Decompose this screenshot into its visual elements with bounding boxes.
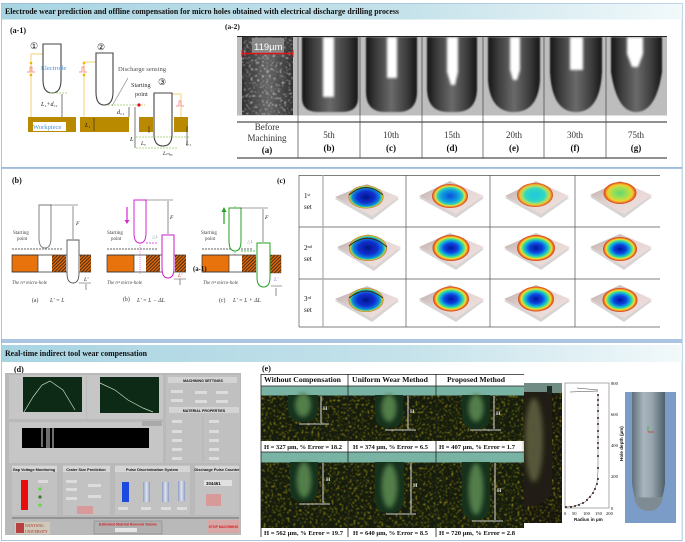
- micrograph: 15th: [427, 37, 477, 112]
- column labels: Before: [255, 122, 279, 132]
- micrograph: proposed 720: [462, 462, 503, 521]
- label: a-2: (a-2): [225, 22, 240, 31]
- micrograph: before machining: 119µm: [254, 42, 283, 53]
- plot: row 3 col 1: [335, 286, 399, 322]
- panel: compensation schematic and surface plots (b, c): [1, 168, 682, 340]
- discharge pulse counter: [194, 465, 240, 515]
- diagram: electrode discharge sensing: Workpiece: [33, 124, 61, 131]
- plot: row 3 col 3: [504, 285, 570, 322]
- strip chart: machining: [9, 421, 163, 463]
- label: d: (d): [14, 365, 24, 374]
- plot: row 2 col 3: [504, 233, 570, 270]
- micrograph: uniform wear 640: H: [413, 483, 418, 489]
- electrode micrographs table: [237, 36, 667, 158]
- micrograph: 30th: [550, 37, 602, 112]
- captions: H = 374 µm, % Error = 6.5: [353, 445, 428, 451]
- plot: row 1 col 2: [419, 181, 484, 218]
- diagram: electrode discharge sensing: L₁: [185, 141, 191, 147]
- micrograph: 10th: [366, 37, 417, 112]
- pulse discrimination system: [115, 465, 190, 515]
- column labels: (a): [262, 145, 272, 155]
- gap voltage monitoring: [12, 465, 57, 515]
- row labels: set: [304, 306, 312, 314]
- chart: gap voltage: [9, 375, 86, 419]
- row labels: [304, 192, 313, 314]
- captions: H = 562 µm, % Error = 19.7: [264, 531, 343, 537]
- micrograph: uniform wear 374: H: [410, 409, 415, 415]
- schematic: L' = L + delta L: △L: [247, 239, 254, 244]
- chart: hole radius vs depth: [564, 381, 624, 522]
- captions: H = 327 µm, % Error = 18.2: [264, 445, 342, 451]
- column headings: Proposed Method: [447, 376, 505, 384]
- axis labels: Hole depth (µm): [619, 426, 624, 461]
- column labels: Machining: [248, 133, 287, 143]
- diagram: electrode discharge sensing: L₁: [84, 123, 90, 129]
- axis labels: 100: [583, 511, 591, 516]
- crater size prediction: [63, 465, 110, 515]
- schematic: L' = L: (a): [32, 297, 39, 304]
- schematic: L' = L + delta L: L' = L + ΔL: [232, 298, 261, 304]
- gap voltage monitoring: Gap Voltage Monitoring: [13, 468, 56, 472]
- diagram: electrode discharge sensing: d꜀₁: [117, 110, 124, 116]
- schematic: L' = L - delta L: point: [111, 237, 122, 242]
- stop machining button: STOP MACHINING: [209, 525, 239, 529]
- panel: offline compensation (a): [1, 3, 682, 168]
- diagram: electrode discharge sensing: Discharge sensing: [118, 66, 167, 73]
- schematic: L' = L: point: [17, 237, 28, 242]
- schematic: L' = L + delta L: F: [264, 215, 269, 221]
- schematic: L' = L: F: [75, 221, 80, 227]
- diagram: electrode discharge sensing: [27, 41, 191, 157]
- diagram: electrode discharge sensing: ①: [30, 41, 38, 51]
- column headings: Without Compensation: [264, 376, 341, 384]
- diagram: electrode discharge sensing: Starting: [131, 82, 151, 89]
- discharge pulse counter: Discharge Pulse Counter: [194, 468, 240, 472]
- captions: [264, 445, 515, 537]
- logo: Nanyang University: UNIVERSITY: [25, 530, 48, 534]
- plot: row 2 col 1: [337, 234, 401, 271]
- column headings: [264, 376, 505, 384]
- schematic: L' = L + delta L: The nᵗʰ micro-hole: [203, 280, 239, 286]
- axis labels: [564, 381, 624, 522]
- axis labels: 50: [572, 511, 577, 516]
- machining settings: MATERIAL PROPERTIES: [183, 409, 226, 413]
- label: a-1: (a-1): [10, 26, 26, 35]
- 3D electrode render: [625, 392, 676, 523]
- micrograph: hole cross-section: [524, 383, 562, 523]
- heading: real-time indirect tool wear compensation: Real-time indirect tool wear compensation: [5, 349, 148, 358]
- plot: row 1 col 4: [590, 181, 652, 218]
- micrograph: without compensation 562: [290, 462, 331, 504]
- discharge pulse counter: 304461: [206, 481, 221, 486]
- column labels: (b): [324, 143, 335, 153]
- schematic: L' = L: [12, 205, 91, 304]
- row labels: set: [304, 203, 312, 211]
- column labels: [248, 122, 644, 155]
- chart: crater size: [87, 375, 163, 419]
- micrograph: before machining: [242, 37, 293, 115]
- captions: H = 720 µm, % Error = 2.8: [439, 531, 515, 537]
- schematic: L' = L - delta L: △L: [152, 234, 159, 239]
- row labels: 3ʳᵈ: [304, 295, 312, 303]
- row labels: set: [304, 255, 312, 263]
- micrograph: uniform wear 640: [375, 462, 418, 514]
- micrograph: uniform wear 374: [375, 394, 416, 430]
- micrograph: 5th: [302, 37, 358, 112]
- header band: offline compensation: [2, 4, 682, 20]
- schematic: L' = L + delta L: Starting: [201, 231, 217, 236]
- schematic: L' = L - delta L: [107, 200, 186, 304]
- plot: row 3 col 2: [419, 285, 484, 322]
- micrograph: without compensation 327: [288, 393, 329, 424]
- column labels: 10th: [383, 130, 399, 140]
- axis labels: 400: [611, 443, 619, 448]
- axis labels: 0: [611, 506, 614, 511]
- diagram: electrode discharge sensing: Lₘₐₓ: [162, 151, 173, 157]
- pulse discrimination system: Pulse Discrimination System: [126, 468, 179, 472]
- schematic: L' = L - delta L: L' = L − ΔL: [136, 298, 165, 304]
- label: b: (b): [12, 176, 22, 185]
- row labels: 2ⁿᵈ: [304, 244, 313, 252]
- schematic: L' = L - delta L: (b): [123, 296, 130, 303]
- column labels: (c): [386, 143, 396, 153]
- schematic: L' = L - delta L: F: [169, 215, 174, 221]
- column labels: 20th: [506, 130, 522, 140]
- micrograph: proposed 407: [462, 394, 501, 430]
- diagram: electrode discharge sensing: L₁+d꜀₁: [40, 102, 58, 108]
- surface plot table: [299, 175, 660, 327]
- plot: row 2 col 4: [590, 234, 652, 270]
- column labels: (e): [509, 143, 519, 153]
- axis labels: Radius in µm: [574, 517, 603, 522]
- label: c: (c): [277, 176, 286, 185]
- plot: row 1 col 3: [505, 181, 569, 218]
- schematic: L' = L: L' = L: [49, 298, 64, 304]
- machining settings: [166, 375, 240, 463]
- schematic: L' = L - delta L: The nᵗʰ micro-hole: [107, 280, 143, 286]
- diagram: electrode discharge sensing: Electrode: [41, 65, 66, 72]
- software screenshot: [5, 373, 241, 535]
- schematic: L' = L + delta L: (c): [219, 297, 226, 304]
- column labels: 5th: [323, 130, 335, 140]
- logo: Nanyang University: NANYANG: [25, 524, 44, 528]
- axis labels: 150: [595, 511, 603, 516]
- machining settings: MACHINING SETTINGS: [183, 379, 223, 383]
- axis labels: 200: [606, 511, 614, 516]
- column headings: Uniform Wear Method: [352, 376, 428, 384]
- captions: H = 640 µm, % Error = 8.5: [353, 531, 428, 537]
- estimated material removal volume: Estimated Material Removal Volume: [99, 522, 157, 526]
- schematic: L' = L: L': [83, 277, 89, 283]
- micrograph: proposed 720: H: [497, 488, 502, 494]
- axis labels: 800: [611, 381, 619, 386]
- header band: real-time: [2, 345, 682, 362]
- label: e: (e): [262, 364, 271, 373]
- column labels: 15th: [444, 130, 460, 140]
- micrograph: 75th: [611, 37, 662, 112]
- schematic: L' = L - delta L: L': [177, 273, 183, 279]
- panel: real-time compensation (d, e): [1, 342, 682, 541]
- diagram: electrode discharge sensing: point: [135, 91, 148, 98]
- estimated material removal volume: [94, 521, 162, 534]
- diagram: electrode discharge sensing: Lₐ: [140, 141, 146, 147]
- micrograph: without compensation 327: H: [323, 406, 328, 412]
- micrograph: without compensation 562: H: [326, 477, 331, 483]
- row labels: 1ˢᵗ: [304, 192, 311, 200]
- data points: [565, 394, 599, 508]
- schematic: L' = L + delta L: (a-1): [193, 266, 207, 273]
- schematic: L' = L: The nᵗʰ micro-hole: [12, 280, 48, 286]
- diagram: electrode discharge sensing: ③: [158, 77, 166, 87]
- column labels: 30th: [567, 130, 583, 140]
- stop machining button: [208, 520, 239, 533]
- plot: row 2 col 2: [419, 233, 484, 270]
- diagram: electrode discharge sensing: ②: [97, 42, 105, 52]
- axis labels: 200: [611, 474, 619, 479]
- schematic: L' = L + delta L: point: [205, 237, 216, 242]
- crater size prediction: Crater Size Prediction: [66, 468, 106, 472]
- plot: row 3 col 4: [590, 285, 652, 322]
- heading: electrode wear prediction: Electrode wear prediction and offline compensation for micro holes obtained with electrical discharge drilling process: [5, 7, 400, 16]
- micrograph comparison table: [261, 374, 524, 537]
- column labels: (g): [631, 143, 641, 153]
- micrograph: 20th: [488, 37, 540, 112]
- column labels: (d): [446, 143, 458, 153]
- schematic: L' = L + delta L: [193, 206, 282, 304]
- schematic: L' = L - delta L: Starting: [107, 231, 123, 236]
- captions: H = 407 µm, % Error = 1.7: [439, 445, 515, 451]
- column labels: 75th: [628, 130, 644, 140]
- micrograph: proposed 407: H: [496, 411, 501, 417]
- diagram: electrode discharge sensing: L: [129, 136, 134, 143]
- schematic: L' = L: Starting: [13, 231, 29, 236]
- column labels: (f): [570, 143, 580, 153]
- axis labels: 600: [611, 412, 619, 417]
- plot: row 1 col 1: [335, 184, 399, 220]
- axis labels: 0: [564, 511, 567, 516]
- logo: Nanyang University: [15, 522, 50, 534]
- schematic: L' = L + delta L: L': [273, 277, 279, 283]
